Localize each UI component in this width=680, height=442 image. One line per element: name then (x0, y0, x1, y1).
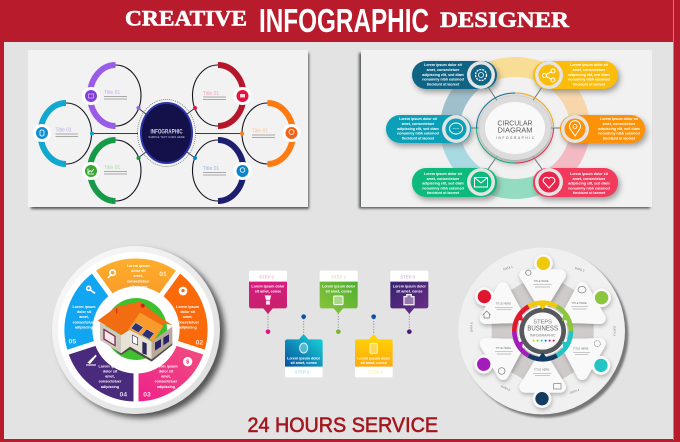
segment text: 04 (120, 391, 127, 398)
pill: yellow: nonummy nibh euismod (568, 78, 610, 82)
ring: orange (240, 103, 300, 164)
segment text: consectetuer (155, 380, 178, 384)
segment text: dolor sit (103, 369, 118, 373)
step card: blue (285, 314, 323, 377)
ring labels: Title 01 (56, 128, 72, 134)
title word: creative: CREATIVE (125, 6, 247, 30)
grey spokes (492, 287, 594, 375)
segment text: adipiscing (75, 326, 93, 330)
step card: green: sit amet, conse (325, 289, 352, 293)
step card: blue: Lorem ipsum dolor (287, 356, 321, 360)
icon: pen (86, 355, 97, 365)
step card: purple (390, 271, 428, 334)
segment text: amet, (134, 274, 143, 278)
pill: green: amet, consectetuer (427, 177, 460, 181)
segment text: dolor sit (180, 310, 196, 314)
petals (467, 254, 618, 408)
pill: teal navy: amet, consectetuer (427, 68, 460, 72)
ring labels: Title 01 (252, 128, 268, 134)
hub: INFOGRAPHIC (530, 334, 556, 338)
pill: teal navy: nonummy nibh euismod (422, 78, 464, 82)
pill: crimson: amet, consectetuer (573, 177, 606, 181)
segment text: 05 (69, 338, 76, 345)
pill: yellow (533, 61, 618, 89)
petal labels: TITLE HERE (573, 347, 589, 351)
petal: yellow (525, 254, 560, 303)
panel: circular diagram (359, 50, 652, 208)
segment text: dolor sit (159, 369, 174, 373)
pill: teal navy: tincidunt ut laoreet (427, 82, 460, 86)
petal: purple (467, 330, 528, 385)
pill: orange: adipiscing elit, sed diam (598, 127, 640, 131)
segment text: amet, (79, 315, 89, 319)
pill: green: adipiscing elit, sed diam (422, 182, 464, 186)
centre badge: SAMPLE TEXT GOES HERE (148, 135, 185, 139)
data labels: DATA 5 (500, 384, 511, 392)
segment text: 03 (143, 391, 151, 398)
segment 02 (160, 270, 210, 353)
pill: orange (560, 115, 645, 143)
pill: yellow: amet, consectetuer (573, 68, 606, 72)
step card: yellow: sit amet, conse (360, 361, 387, 365)
ring pointers (515, 301, 571, 361)
green lawn (105, 298, 167, 360)
panel: five segment house wheel (52, 246, 225, 418)
panel: six ring infographic (28, 50, 309, 209)
pill: orange: amet, consectetuer (603, 122, 636, 126)
segment text: adipiscing (101, 385, 119, 389)
pill: crimson (533, 168, 618, 197)
wheel disc (52, 246, 225, 418)
ring labels: Title 01 (203, 166, 219, 172)
pill shadows (388, 64, 647, 200)
step card: yellow: STEP 1 (368, 369, 383, 374)
segment 05 (62, 270, 112, 353)
pill: yellow: Lorem ipsum dolor sit (570, 63, 609, 67)
data labels: DATA 1 (503, 265, 514, 271)
petal labels: TITLE HERE (534, 368, 550, 372)
pill: teal navy: Lorem ipsum dolor sit (424, 63, 463, 67)
panel: five step timeline (249, 271, 428, 377)
centre disc: INFOGRAPHIC (496, 136, 535, 140)
centre disc: CIRCULAR (498, 118, 533, 128)
data labels: DATA 4 (569, 388, 580, 395)
colour ring (514, 303, 571, 359)
footer heading: 24 hours service: 24 HOURS SERVICE (248, 414, 438, 437)
segment text: Lorem ipsum (99, 364, 122, 368)
step card: green: STEP 1 (331, 274, 347, 279)
outline icons (483, 270, 600, 389)
segment text: dolor sit (131, 269, 146, 273)
ring labels (56, 90, 268, 172)
ring: red (192, 65, 252, 126)
ring: green (82, 140, 141, 201)
petal: navy (525, 359, 560, 408)
ring: navy (192, 140, 252, 201)
hub: STEPS (533, 319, 552, 325)
pill: teal: amet, consectetuer (402, 122, 435, 126)
ring: purple (82, 65, 141, 126)
segment 04 (66, 343, 136, 404)
ring labels: Title 01 (203, 91, 219, 97)
centre disc (476, 93, 554, 164)
step card: pink (249, 271, 287, 334)
icon: key (87, 286, 95, 293)
hub: BUSINESS (527, 326, 558, 333)
step card: purple: sit amet, conse (396, 289, 423, 293)
pill: orange: nonummy nibh euismod (598, 132, 640, 136)
segment text: adipiscing (157, 385, 175, 389)
pill: green: tincidunt ut laoreet (427, 191, 460, 195)
title word: infographic: INFOGRAPHIC (259, 2, 429, 39)
step card: pink: Lorem ipsum dolor (251, 285, 285, 289)
step card: purple: Lorem ipsum dolor (393, 285, 426, 289)
segment text: adipiscing (129, 285, 147, 289)
petal placeholder lines (495, 285, 590, 376)
pill: crimson: Lorem ipsum dolor sit (570, 172, 609, 176)
pill: crimson: adipiscing elit, sed diam (568, 182, 610, 186)
ring segments (450, 67, 580, 189)
segment text: 01 (159, 271, 167, 278)
segment text: dolor sit (77, 310, 92, 314)
step card: pink: sit amet, conse (255, 289, 281, 293)
spokes (471, 87, 560, 169)
segment text: Lorem ipsum (155, 364, 178, 368)
segment 03 (136, 343, 206, 404)
icon: dollar: $ (186, 360, 190, 366)
step card: green: Lorem ipsum dolor (322, 285, 356, 289)
petal labels: TITLE HERE (496, 346, 511, 350)
pill: teal navy (412, 61, 497, 89)
ring labels: Title 01 (104, 90, 120, 96)
petal labels: TITLE HERE (496, 302, 511, 306)
centre disc: DIAGRAM (498, 126, 532, 134)
centre badge (138, 100, 196, 166)
segment text: consectetuer (99, 380, 122, 384)
title (125, 2, 570, 39)
step card: green (320, 271, 358, 334)
segment text: amet, (161, 374, 171, 378)
segment text: consectetuer (176, 320, 200, 324)
petal labels (496, 279, 589, 372)
house illustration (98, 302, 172, 362)
connector lines (92, 108, 242, 158)
pill: yellow: tincidunt ut laoreet (573, 82, 606, 86)
pill: teal: nonummy nibh euismod (397, 132, 439, 136)
segment text: 02 (196, 340, 203, 347)
segment text: adipiscing (179, 326, 197, 330)
pill: green (412, 168, 497, 197)
segment text: amet, (105, 374, 115, 378)
disc (462, 251, 628, 418)
pill: teal (386, 115, 471, 143)
segment text: Lorem ipsum (127, 264, 151, 268)
connector dotted lines (268, 313, 409, 334)
segment text (69, 264, 203, 398)
segment text: Lorem ipsum (73, 305, 96, 309)
step card: yellow: Lorem ipsum dolor (357, 356, 391, 360)
step card: blue: sit amet, conse (290, 361, 317, 365)
petal labels: TITLE HERE (533, 279, 549, 283)
icon: magnifier (108, 270, 115, 278)
ring labels: Title 01 (104, 165, 120, 171)
petal: cyan (558, 330, 618, 385)
petal labels: TITLE HERE (571, 301, 587, 305)
segment text: consectetuer (127, 280, 150, 284)
step card: yellow (355, 314, 393, 377)
ring label placeholder lines (56, 96, 275, 175)
pill: crimson: tincidunt ut laoreet (573, 191, 606, 195)
segment text: Lorem ipsum (176, 305, 200, 309)
pill: crimson: nonummy nibh euismod (568, 186, 610, 190)
icon: location pin (179, 287, 187, 295)
step card: blue: STEP 2 (295, 369, 310, 374)
segment text: amet, (183, 315, 192, 319)
step card: purple: STEP 3 (400, 274, 416, 279)
pill: green: nonummy nibh euismod (422, 186, 464, 190)
data labels (470, 265, 617, 395)
pill: yellow: adipiscing elit, sed diam (568, 73, 610, 77)
ring: blue (33, 103, 94, 164)
hub (518, 306, 567, 356)
pill: orange: Lorem ipsum dolor sit (600, 117, 639, 121)
step card: pink: STEP 1 (259, 274, 275, 279)
pill: teal: adipiscing elit, sed diam (397, 127, 439, 131)
pill: teal navy: adipiscing elit, sed diam (422, 73, 464, 77)
data labels: DATA 6 (470, 322, 474, 332)
segment text: consectetuer (73, 320, 96, 324)
petal: red (467, 277, 528, 332)
petal: green (558, 277, 618, 332)
title word: designer: DESIGNER (440, 7, 570, 32)
pill: teal: Lorem ipsum dolor sit (399, 117, 438, 121)
panel: steps business wheel (458, 248, 628, 418)
pill: green: Lorem ipsum dolor sit (424, 172, 463, 176)
pill: orange: tincidunt ut laoreet (603, 136, 636, 140)
centre badge: INFOGRAPHIC (150, 130, 183, 136)
pill: teal: tincidunt ut laoreet (402, 136, 435, 140)
data labels: DATA 2 (574, 266, 585, 273)
data labels: DATA 3 (613, 326, 617, 336)
segment 01 (92, 256, 180, 297)
